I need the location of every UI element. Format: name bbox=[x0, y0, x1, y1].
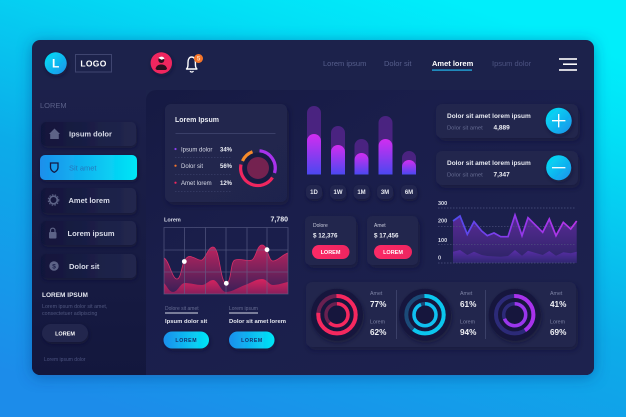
icon: notification bell bbox=[186, 54, 203, 72]
area chart with grid: 7,780 bbox=[270, 216, 288, 224]
menu item: Ipsum dolor: Ipsum dolor bbox=[69, 130, 112, 138]
info block: Ipsum dolor sit bbox=[164, 306, 209, 348]
menu item: Sit amet active bbox=[40, 155, 137, 180]
icon: notification bell: 5 bbox=[197, 57, 201, 63]
menu item: Dolor sit bbox=[41, 254, 136, 278]
button: LOREM bbox=[175, 338, 197, 344]
legend rows: 34% bbox=[220, 147, 233, 153]
panel: donut summary card: Lorem Ipsum bbox=[175, 117, 219, 124]
card: minus bbox=[436, 151, 578, 185]
sidebar button bbox=[42, 324, 88, 342]
labels: pink: Lorem bbox=[370, 320, 386, 326]
icon: plus button bbox=[546, 108, 572, 134]
labels: cyan bbox=[460, 291, 477, 337]
menu item: Amet lorem: Amet lorem bbox=[68, 196, 110, 205]
labels: purple: 69% bbox=[550, 328, 567, 337]
header logo bbox=[45, 52, 112, 74]
menu item: Dolor sit: $ bbox=[52, 263, 56, 270]
top navigation bbox=[323, 59, 532, 71]
line chart: 200 bbox=[438, 218, 447, 224]
legend rows: Dolor sit bbox=[181, 164, 203, 170]
line chart: 300 bbox=[438, 201, 447, 207]
labels: cyan: 94% bbox=[460, 328, 477, 337]
donut chart bbox=[241, 151, 275, 186]
card: Amet value: $ 17,456 bbox=[374, 232, 399, 240]
top navigation: Dolor sit bbox=[384, 59, 412, 68]
info block: Dolor sit amet lorem: Dolor sit amet lorem bbox=[229, 319, 286, 325]
area chart with grid: Lorem bbox=[164, 218, 181, 224]
legend rows: 56% bbox=[220, 164, 233, 170]
sidebar button: LOREM bbox=[55, 332, 75, 338]
sidebar text block: consectetuer adipiscing bbox=[42, 311, 97, 317]
sidebar footer text: Lorem ipsum dolor bbox=[44, 357, 86, 363]
card: Dolore value: Dolore bbox=[313, 223, 328, 229]
line chart: 100 bbox=[438, 238, 447, 244]
menu item: Sit amet active: Sit amet bbox=[69, 164, 97, 172]
card: plus: 4,889 bbox=[494, 124, 510, 132]
info block: Ipsum dolor sit: Ipsum dolor sit bbox=[165, 319, 207, 325]
labels: cyan: Amet bbox=[460, 291, 473, 297]
card: plus: Dolor sit amet bbox=[447, 126, 483, 132]
labels: pink: 62% bbox=[370, 328, 387, 337]
info block: Dolor sit amet lorem: Lorem ipsum bbox=[229, 306, 258, 312]
card: plus: Dolor sit amet lorem ipsum bbox=[447, 113, 531, 120]
line chart bbox=[438, 201, 577, 263]
time range buttons: 1M bbox=[357, 190, 366, 196]
panel: radial progress bbox=[306, 282, 576, 347]
labels: cyan: Lorem bbox=[460, 320, 476, 326]
bar chart bbox=[307, 106, 416, 174]
top navigation: Amet lorem bbox=[432, 59, 474, 68]
radial chart: pink bbox=[311, 289, 363, 341]
sidebar heading: LOREM bbox=[40, 101, 67, 110]
menu item: Lorem ipsum: Lorem ipsum bbox=[68, 229, 115, 238]
area chart with grid bbox=[164, 216, 288, 294]
radial chart: purple bbox=[489, 289, 541, 341]
icon: avatar bbox=[151, 52, 172, 74]
card: minus: 7,347 bbox=[494, 171, 510, 178]
icon: hamburger menu bbox=[559, 58, 577, 71]
top navigation: Ipsum dolor bbox=[492, 59, 532, 68]
labels: pink: Amet bbox=[370, 291, 383, 297]
button: LOREM bbox=[241, 338, 263, 344]
panel: donut summary card bbox=[165, 104, 287, 202]
labels: purple: Amet bbox=[550, 291, 563, 297]
button: LOREM bbox=[383, 250, 403, 256]
sidebar text block: LOREM IPSUM bbox=[42, 292, 88, 299]
sidebar menu bbox=[40, 101, 137, 363]
header logo: LOGO bbox=[80, 58, 107, 68]
time range buttons: 1D bbox=[310, 190, 319, 196]
radial chart: cyan bbox=[399, 289, 451, 341]
menu item: Ipsum dolor bbox=[41, 122, 136, 146]
icon: minus button bbox=[546, 155, 571, 180]
time range buttons bbox=[306, 185, 417, 199]
time range buttons: 1W bbox=[334, 190, 343, 196]
dashboard panel bbox=[32, 40, 594, 375]
menu item: Lorem ipsum bbox=[41, 221, 136, 245]
labels: purple bbox=[550, 291, 567, 337]
labels: pink bbox=[370, 291, 387, 337]
button: LOREM bbox=[321, 250, 341, 256]
card: plus bbox=[436, 104, 578, 138]
sidebar text block: Lorem ipsum dolor sit amet, bbox=[42, 304, 107, 310]
sidebar background bbox=[32, 90, 146, 375]
sidebar text block bbox=[42, 292, 107, 317]
card: Amet value bbox=[367, 216, 418, 265]
card: Amet value: Amet bbox=[374, 223, 386, 229]
time range buttons: 6M bbox=[405, 190, 413, 196]
card: minus: Dolor sit amet bbox=[447, 172, 483, 178]
time range buttons: 3M bbox=[381, 190, 389, 196]
labels: cyan: 61% bbox=[460, 300, 477, 309]
card: minus: Dolor sit amet lorem ipsum bbox=[447, 160, 531, 167]
labels: purple: 41% bbox=[550, 300, 567, 309]
labels: purple: Lorem bbox=[550, 320, 566, 326]
legend rows: Ipsum dolor bbox=[181, 147, 212, 153]
legend rows: 12% bbox=[220, 181, 233, 187]
card: Dolore value: $ 12,376 bbox=[313, 232, 338, 240]
legend rows: Amet lorem bbox=[181, 181, 212, 187]
info block: Ipsum dolor sit: Dolore sit amet bbox=[165, 306, 199, 312]
line chart: 0 bbox=[438, 256, 441, 262]
header logo: L bbox=[52, 56, 59, 70]
menu item: Amet lorem bbox=[41, 188, 136, 213]
card: Dolore value bbox=[305, 216, 356, 265]
info block: Dolor sit amet lorem bbox=[229, 306, 286, 348]
content area background bbox=[146, 90, 594, 375]
top navigation: Lorem ipsum bbox=[323, 59, 366, 68]
menu item: Dolor sit: Dolor sit bbox=[69, 262, 100, 271]
legend rows bbox=[174, 147, 233, 192]
labels: pink: 77% bbox=[370, 300, 387, 309]
